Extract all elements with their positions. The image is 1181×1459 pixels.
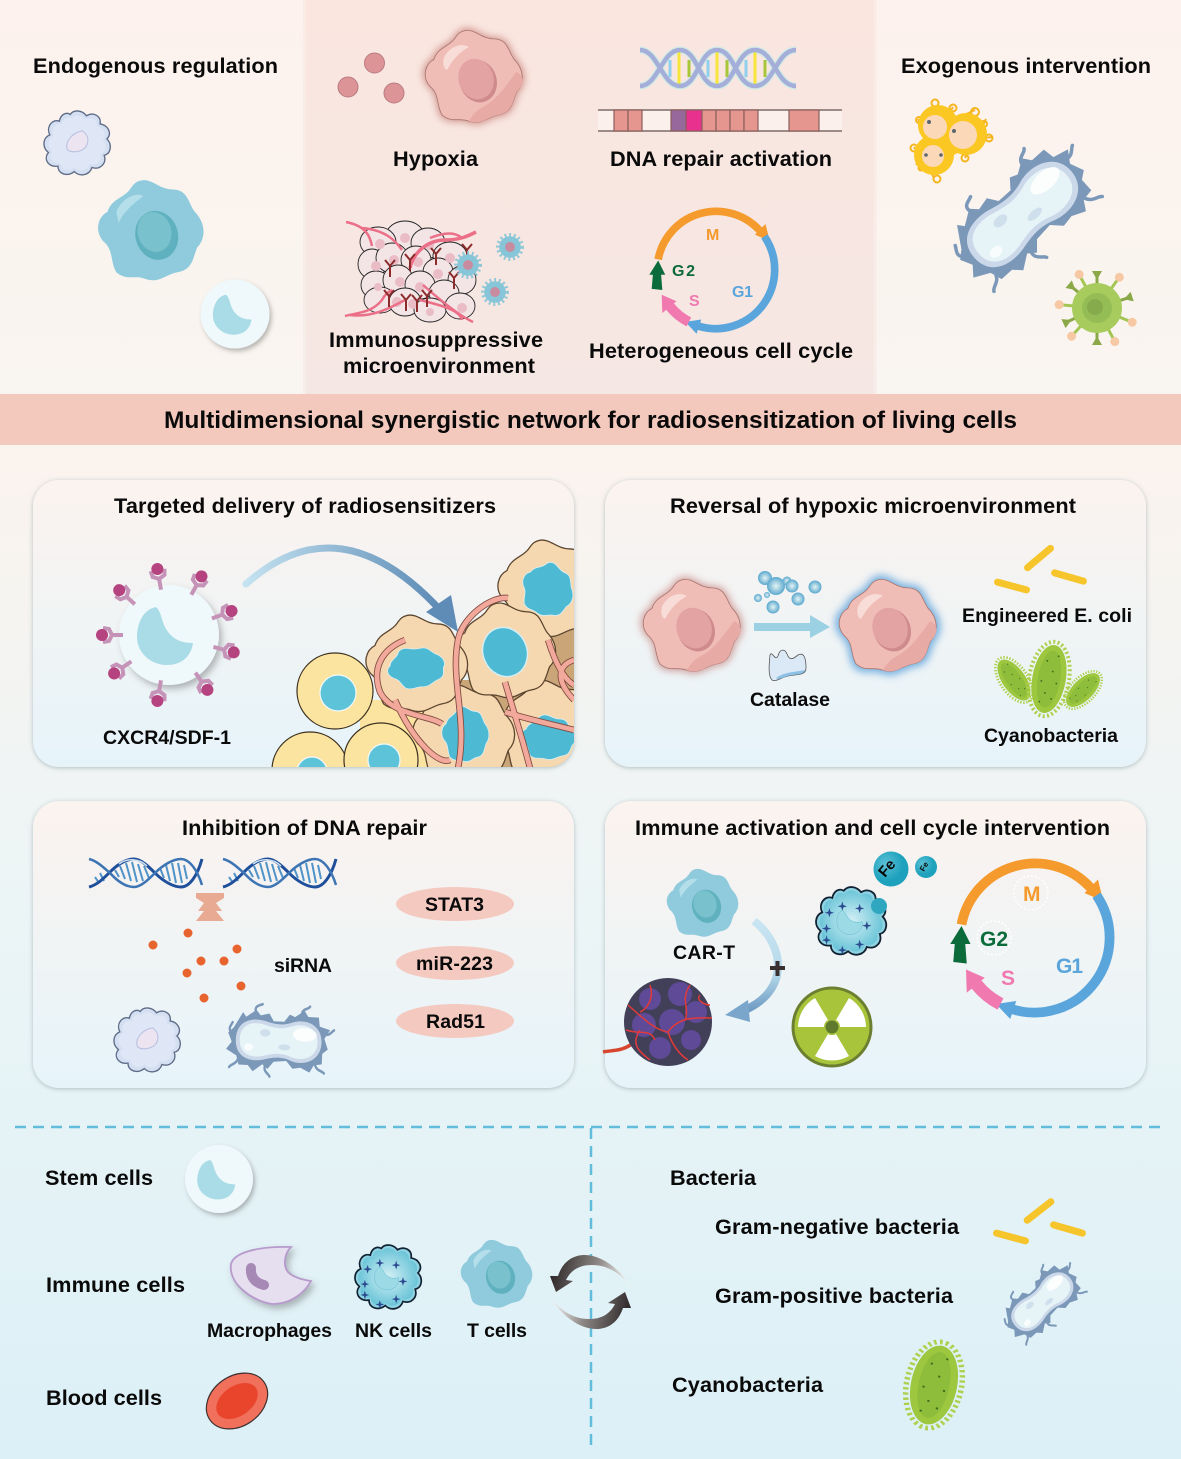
main title: Multidimensional synergistic network for radiosensitization of living cells: [164, 407, 1017, 434]
legend: cell types: [45, 1145, 532, 1440]
central problem panel: [303, 0, 877, 395]
cycle phase labels: [672, 227, 753, 310]
icon: cell cycle: [950, 863, 1110, 1019]
section: exogenous intervention: [901, 53, 1151, 348]
icon: oxygen spheres: [338, 53, 404, 103]
icon: gram-positive bacterium: [992, 1251, 1095, 1351]
icon: engineered stem cell with receptors: [96, 562, 241, 708]
icon: macrophage: [44, 111, 110, 175]
label: CXCR4/SDF-1: CXCR4/SDF-1: [103, 727, 231, 749]
panel: inhibition of DNA repair: [33, 801, 574, 1088]
heading: Inhibition of DNA repair: [182, 815, 428, 840]
section: immunosuppressive microenvironment: [329, 221, 543, 378]
panel: immune activation and cell cycle intervention: [603, 801, 1146, 1088]
label: bacteria: Bacteria: [670, 1165, 757, 1190]
label: immune cells: Immune cells: [46, 1272, 185, 1297]
icon: plus: [770, 961, 785, 976]
section: DNA repair activation: [598, 50, 842, 171]
cycle phase labels: G1: [1056, 955, 1083, 978]
icon: cyanobacterium: [898, 1337, 970, 1433]
label: T cells: T cells: [467, 1320, 527, 1342]
heading: exogenous intervention: Exogenous intervention: [901, 53, 1151, 78]
label: immunosuppressive microenvironment: [329, 327, 543, 378]
label: catalase: Catalase: [750, 689, 830, 711]
target: miR-223: miR-223: [416, 953, 493, 975]
icon: gene strip: [598, 110, 842, 131]
illustration: tumour cluster: [272, 539, 574, 767]
heading: Immune activation and cell cycle intervention: [635, 815, 1110, 840]
label: immunosuppressive microenvironment: Immunosuppressive: [329, 327, 543, 352]
label: gram-positive bacteria: Gram-positive bacteria: [715, 1283, 954, 1308]
arrow: combination: [725, 921, 778, 1022]
label: hypoxia: Hypoxia: [393, 146, 479, 171]
label: cyanobacteria: Cyanobacteria: [672, 1372, 824, 1397]
icon: radiation: [793, 988, 871, 1066]
section: endogenous regulation: [33, 53, 278, 348]
icon: hypoxic cell: [640, 577, 743, 674]
icon: oxygen bubbles: [754, 571, 822, 614]
icon: interconversion arrows: [550, 1255, 631, 1329]
icon: tumour tissue: [345, 221, 476, 322]
icon: T cell: [98, 180, 204, 280]
icon: immune cells: [456, 235, 522, 304]
target: STAT3: STAT3: [425, 894, 484, 916]
icon: NK cell: [355, 1245, 421, 1309]
label: heterogeneous cell cycle: Heterogeneous cell cycle: [589, 338, 853, 363]
icon: Fe nanoparticles: Fe: [875, 856, 899, 881]
label: NK cells: NK cells: [355, 1320, 432, 1342]
title band: [0, 394, 1181, 445]
legend: bacteria: [670, 1165, 1095, 1433]
icon: engineered E. coli: [998, 548, 1083, 590]
cycle phase labels: G2: [980, 928, 1008, 951]
cycle phase labels: S: [689, 293, 700, 310]
label: cyanobacteria: Cyanobacteria: [984, 725, 1118, 747]
cycle phase labels: [977, 876, 1083, 990]
target: Rad51: [396, 1004, 514, 1038]
icon: gram-negative rods: [997, 1202, 1082, 1241]
arrow: delivery to tumour: [246, 548, 458, 632]
label: siRNA: siRNA: [274, 955, 332, 977]
label: DNA repair activation: DNA repair activation: [610, 146, 832, 171]
icon: tumour: [603, 978, 712, 1066]
label: immunosuppressive microenvironment: microenvironment: [343, 353, 535, 378]
cycle phase labels: G1: [732, 284, 753, 301]
cycle phase labels: S: [1001, 967, 1015, 990]
section: hypoxia: [338, 28, 525, 171]
icon: catalase: [769, 650, 806, 681]
label: stem cells: Stem cells: [45, 1165, 153, 1190]
icon: cyanobacteria: [988, 638, 1108, 720]
icon: hypoxic cell: [423, 28, 525, 125]
top background: [0, 0, 1181, 395]
heading: endogenous regulation: Endogenous regulation: [33, 53, 278, 78]
icon: reoxygenated cell: [835, 575, 941, 675]
icon: Fe nanoparticles: Fe: [918, 860, 931, 873]
label: CAR-T: CAR-T: [673, 942, 735, 964]
cycle phase labels: G2: [672, 263, 695, 280]
heading: Targeted delivery of radiosensitizers: [114, 493, 496, 518]
panel: reversal of hypoxic microenvironment: [605, 480, 1146, 767]
icon: NK cell: [816, 887, 887, 955]
lower background: [0, 444, 1181, 1459]
icon: stem cell: [200, 280, 270, 348]
cycle phase labels: M: [1023, 883, 1040, 906]
icon: green virus: [1054, 268, 1138, 348]
target: miR-223: [396, 946, 514, 980]
icon: siRNA particles: [148, 928, 246, 1002]
legend dividers: [15, 1127, 1166, 1446]
icon: gram-positive bacterium: [225, 1002, 335, 1080]
target: Rad51: Rad51: [426, 1011, 485, 1033]
icon: DNA strands: [89, 859, 336, 887]
icon: Fe nanoparticles: [874, 852, 937, 886]
label: gram-negative bacteria: Gram-negative bacteria: [715, 1214, 960, 1239]
cycle phase labels: M: [706, 227, 719, 244]
label: macrophages: Macrophages: [207, 1320, 332, 1342]
panel: targeted delivery of radiosensitizers: [30, 478, 576, 770]
arrow: reoxygenation: [754, 615, 830, 638]
section: heterogeneous cell cycle: [589, 211, 853, 363]
icon: T cell: [461, 1240, 532, 1308]
icon: red blood cell: [196, 1362, 278, 1440]
icon: inhibition mark: [196, 893, 224, 921]
heading: Reversal of hypoxic microenvironment: [670, 493, 1076, 518]
icon: DNA helix: [640, 50, 796, 86]
icon: stem cell: [185, 1145, 253, 1213]
label: blood cells: Blood cells: [46, 1385, 162, 1410]
icon: yellow coccus: [910, 100, 992, 182]
icon: macrophage: [114, 1008, 180, 1072]
icon: macrophage: [231, 1247, 311, 1304]
icon: cell cycle: [649, 211, 775, 334]
icon: gram-positive bacterium: [932, 123, 1117, 303]
target: STAT3: [396, 887, 514, 921]
label: engineered E. coli: Engineered E. coli: [962, 605, 1132, 627]
icon: CAR-T cell: [667, 869, 738, 937]
